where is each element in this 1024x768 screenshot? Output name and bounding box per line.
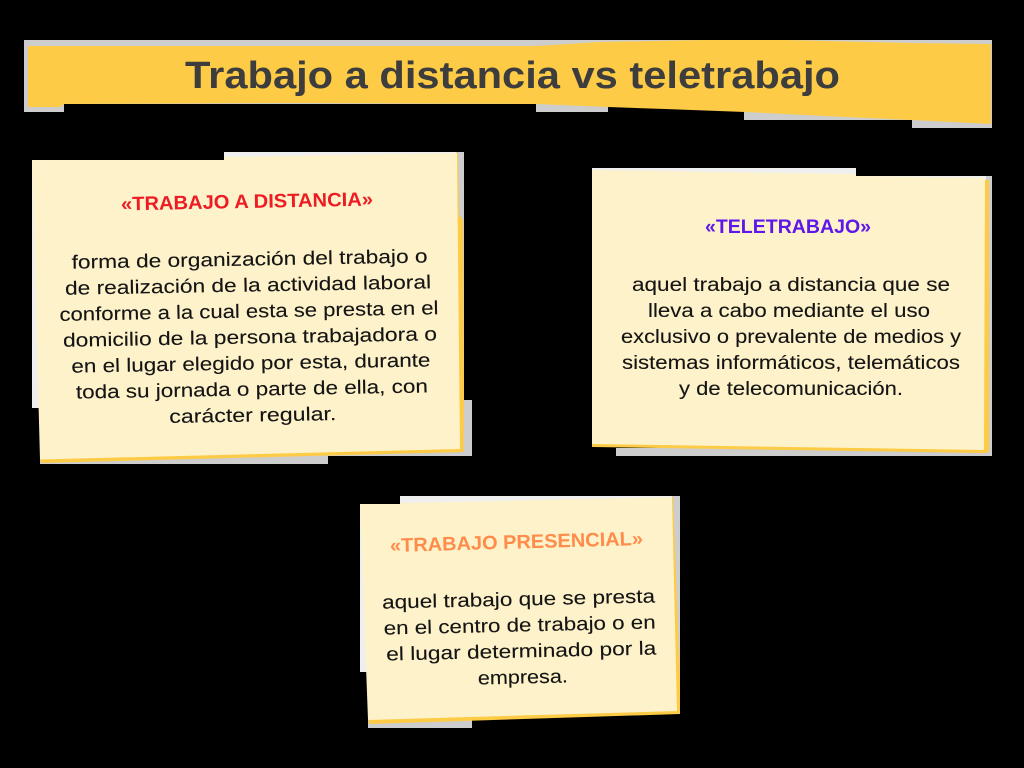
definition text: teletrabajo: exclusivo o prevalente de medios y bbox=[621, 327, 962, 348]
panel: teletrabajo bbox=[592, 168, 992, 456]
definition text: trabajo a distancia: de realización de la actividad laboral bbox=[65, 272, 431, 300]
heading: trabajo presencial: «TRABAJO PRESENCIAL» bbox=[390, 528, 643, 557]
title banner bbox=[24, 40, 992, 128]
panel: trabajo a distancia bbox=[32, 152, 472, 464]
definition text: teletrabajo: lleva a cabo mediante el uso bbox=[648, 301, 930, 322]
definition text: teletrabajo: sistemas informáticos, telemáticos bbox=[622, 353, 960, 374]
definition text: teletrabajo: aquel trabajo a distancia que se bbox=[632, 275, 950, 296]
heading: trabajo a distancia: «TRABAJO A DISTANCIA» bbox=[121, 189, 373, 215]
definition text: teletrabajo bbox=[621, 275, 962, 400]
heading: teletrabajo: «TELETRABAJO» bbox=[705, 216, 871, 238]
definition text: trabajo a distancia: en el lugar elegido por esta, durante bbox=[71, 350, 431, 378]
definition text: trabajo a distancia: toda su jornada o parte de ella, con bbox=[76, 376, 428, 404]
definition text: trabajo presencial: en el centro de trabajo o en bbox=[383, 612, 656, 640]
definition text: trabajo presencial: aquel trabajo que se presta bbox=[382, 586, 656, 614]
definition text: trabajo a distancia: conforme a la cual esta se presta en el bbox=[59, 298, 439, 326]
definition text: trabajo a distancia bbox=[58, 246, 440, 430]
definition text: trabajo presencial: empresa. bbox=[478, 666, 568, 689]
definition text: trabajo a distancia: domicilio de la persona trabajadora o bbox=[63, 324, 437, 352]
definition text: trabajo a distancia: carácter regular. bbox=[169, 404, 336, 428]
panel: trabajo presencial bbox=[360, 496, 680, 728]
definition text: trabajo a distancia: forma de organización del trabajo o bbox=[71, 246, 428, 274]
definition text: trabajo presencial bbox=[382, 586, 658, 692]
definition text: trabajo presencial: el lugar determinado por la bbox=[386, 638, 657, 666]
definition text: teletrabajo: y de telecomunicación. bbox=[679, 379, 903, 400]
title text: Trabajo a distancia vs teletrabajo bbox=[185, 55, 840, 97]
